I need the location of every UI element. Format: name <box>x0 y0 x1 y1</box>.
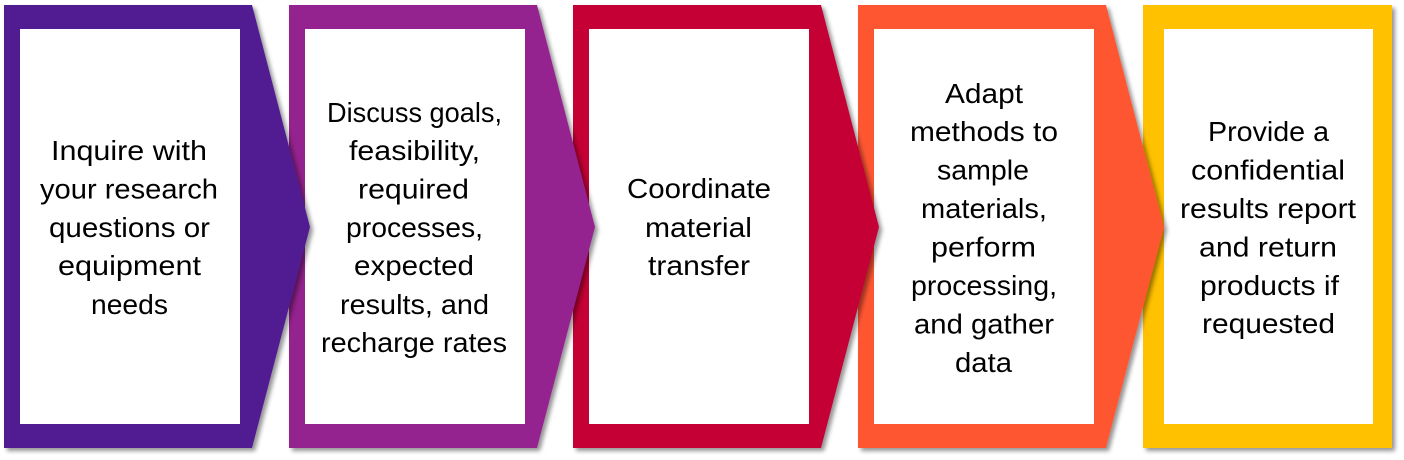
step 5 text: requested <box>1202 308 1335 339</box>
step 4 text: materials, <box>921 193 1047 224</box>
step 5 text: results report <box>1180 193 1356 224</box>
step 4 text: perform <box>931 232 1036 262</box>
step 1 text: Inquire with <box>51 135 207 166</box>
step 3 text <box>627 173 771 281</box>
step 2 text: feasibility, <box>349 135 480 166</box>
step 3 text: material <box>645 212 752 243</box>
step 1 text: questions or <box>49 212 210 243</box>
step 4 text: processing, <box>911 270 1057 301</box>
step 4 text: methods to <box>910 116 1058 147</box>
amber frame <box>1143 5 1392 448</box>
step 2 text: Discuss goals, <box>327 97 502 128</box>
step 1: inquire <box>4 5 310 448</box>
step 1 text: equipment <box>58 250 201 281</box>
step 2 text: results, and <box>340 289 489 320</box>
step 2: discuss goals <box>289 5 595 448</box>
step 5 text: Provide a <box>1208 116 1329 147</box>
step 4 text: and gather <box>914 308 1054 340</box>
purple arrow shape <box>4 5 310 448</box>
step 1 text: needs <box>91 289 168 320</box>
step 5 text: and return <box>1199 232 1337 262</box>
white text panel <box>874 29 1094 424</box>
step 2 text: processes, <box>346 212 483 243</box>
step 3 text: Coordinate <box>627 173 771 204</box>
step 5 text <box>1180 116 1356 339</box>
step 1 text: your research <box>40 174 218 204</box>
white text panel <box>1164 29 1373 424</box>
step 2 text: required <box>358 174 469 204</box>
step 2 text: recharge rates <box>321 327 507 358</box>
step 4 text: Adapt <box>945 78 1023 109</box>
white text panel <box>305 29 525 424</box>
step 2 text <box>321 97 507 358</box>
step 5 text: products if <box>1200 270 1339 301</box>
step 5: results report <box>1143 5 1392 448</box>
step 1 text <box>40 135 218 320</box>
crimson arrow shape <box>573 5 879 448</box>
white text panel <box>20 29 240 424</box>
step 2 text: expected <box>354 250 474 281</box>
step 3 text: transfer <box>648 250 750 281</box>
orange arrow shape <box>858 5 1164 448</box>
step 4: adapt and process <box>858 5 1164 448</box>
step 5 text: confidential <box>1191 154 1345 186</box>
white text panel <box>589 29 809 424</box>
step 3: coordinate transfer <box>573 5 879 448</box>
step 4 text: sample <box>937 154 1029 186</box>
magenta arrow shape <box>289 5 595 448</box>
step 4 text: data <box>955 347 1012 378</box>
step 4 text <box>910 78 1058 378</box>
